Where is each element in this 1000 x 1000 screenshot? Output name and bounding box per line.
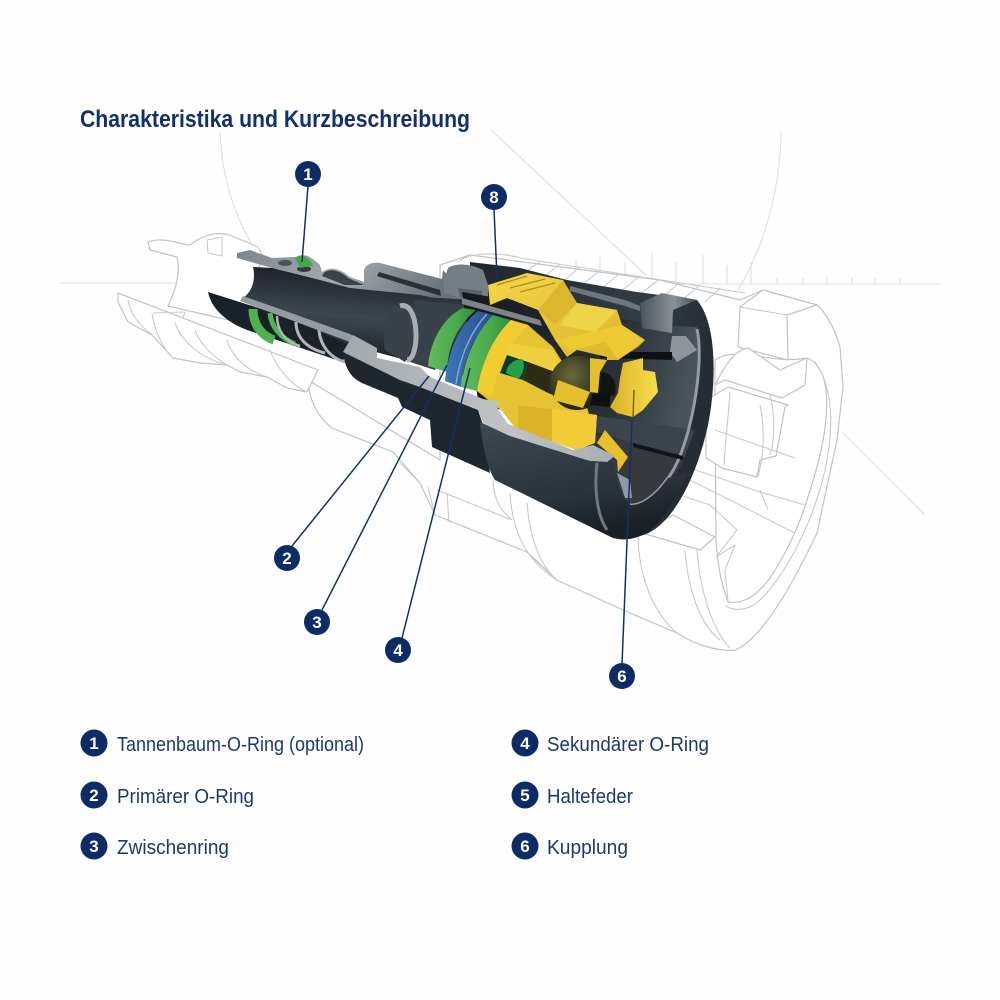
lower cup edge highlight <box>596 463 607 530</box>
lower chamber panel <box>580 430 684 505</box>
legend item 4: Sekundärer O-Ring <box>547 734 709 756</box>
callout marker 2 <box>274 545 300 571</box>
ghost outline: cylinder body and front ring <box>308 254 843 650</box>
legend item 1: Tannenbaum-O-Ring (optional) <box>117 734 364 756</box>
lower grey cut surface <box>343 335 615 462</box>
callout marker 6: 6 <box>617 667 627 686</box>
callout marker 3 <box>304 609 330 635</box>
legend item 4 <box>512 730 709 756</box>
inner tube <box>243 262 480 380</box>
spring arm <box>590 358 607 393</box>
callout marker 8: 8 <box>489 188 499 207</box>
outer cup back wall <box>470 262 714 539</box>
green and metal rings in the tube <box>253 309 345 362</box>
legend item 5 <box>512 782 633 808</box>
grey step on the upper cup <box>443 264 488 304</box>
wall between flared end and O-ring <box>410 300 465 370</box>
top grey block <box>640 293 697 333</box>
leader line 6 <box>622 420 632 664</box>
spring window with green ring <box>500 355 528 380</box>
lower dark step body <box>343 352 490 473</box>
right spring clip <box>610 358 658 417</box>
leader line 8 <box>494 209 497 278</box>
legend item 2: 2 <box>89 786 99 805</box>
callout marker 1: 1 <box>303 165 313 184</box>
lip of the lower tube wall <box>240 296 374 352</box>
legend item 2: Primärer O-Ring <box>117 786 254 808</box>
flared end of the tube with silver ring <box>384 305 416 362</box>
ghost outline: upper-left sleeve <box>148 234 262 325</box>
legend item 5: Haltefeder <box>547 786 633 808</box>
opening glimpse <box>617 473 632 498</box>
leader line 3 <box>322 365 447 610</box>
legend item 6: Kupplung <box>547 837 628 859</box>
callout marker 3: 3 <box>312 613 322 632</box>
callout marker 2: 2 <box>282 549 292 568</box>
leader line 1 <box>302 186 308 262</box>
ghost: sleeve window <box>207 237 222 256</box>
dark lower-left shell <box>208 292 350 362</box>
legend item 3: 3 <box>89 837 99 856</box>
legend item 3 <box>80 832 229 860</box>
legend item 6 <box>512 832 628 860</box>
callout marker 4: 4 <box>393 641 403 660</box>
legend item 2 <box>80 782 254 808</box>
yellow ring and spring body <box>477 273 658 472</box>
legend item 5: 5 <box>520 786 530 805</box>
chamber band grey <box>590 415 695 458</box>
chamber ledge <box>670 336 697 362</box>
legend item 6: 6 <box>520 837 530 856</box>
ghost: hatched top of the sleeve <box>458 254 745 302</box>
inner grey sleeve <box>462 298 542 326</box>
leader line 4 <box>402 368 470 638</box>
green tree ring visible in the band <box>295 256 313 268</box>
callout marker 6 <box>609 663 635 689</box>
ghost: lower block <box>642 515 715 550</box>
spring top arm <box>488 273 645 360</box>
ghost: inner parts <box>715 348 807 398</box>
secondary O-ring green <box>461 315 511 391</box>
lower clip <box>597 430 628 472</box>
dark wedge <box>523 362 555 393</box>
legend item 1: 1 <box>89 734 99 753</box>
legend item 1 <box>80 730 364 756</box>
ghost outline: lower-left ridges <box>118 293 318 392</box>
chamber dark bar <box>600 352 672 360</box>
primary O-ring green <box>428 308 476 372</box>
lower cup body <box>480 422 687 539</box>
ghost: front ring opening <box>715 354 827 602</box>
rim highlight <box>630 329 699 505</box>
legend item 4: 4 <box>520 734 530 753</box>
title: Charakteristika und Kurzbeschreibung <box>80 106 470 133</box>
central dark opening <box>550 356 604 410</box>
yellow block <box>518 405 597 450</box>
callout marker 4 <box>385 637 411 663</box>
legend <box>80 730 709 860</box>
construction lines behind the drawing <box>60 130 940 515</box>
legend item 3: Zwischenring <box>117 837 229 859</box>
small centre clip <box>553 380 590 408</box>
callout marker 8 <box>481 184 507 210</box>
callout marker 1 <box>295 161 321 187</box>
thin grey strip in the upper cup <box>570 286 640 311</box>
leader line 2 <box>292 376 429 546</box>
cup chamber <box>462 292 699 505</box>
upper grey cut band <box>237 250 470 300</box>
ghost: top block <box>738 290 817 360</box>
blue intermediate ring <box>445 311 493 387</box>
